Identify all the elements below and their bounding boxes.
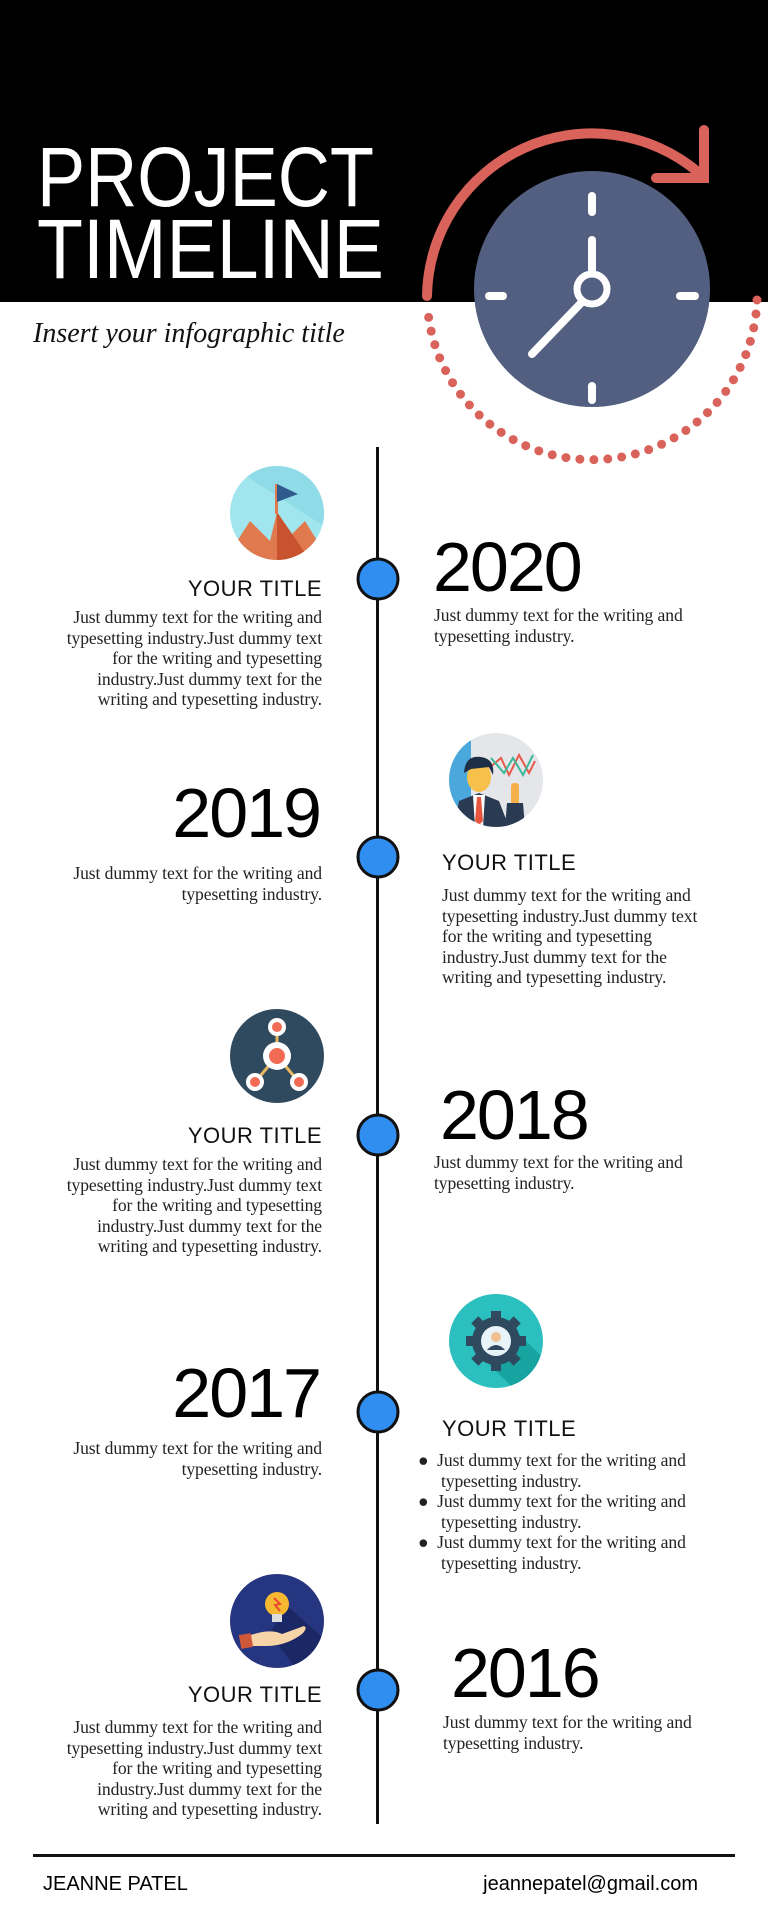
footer rule [33,1854,735,1857]
entry 2016 right text: Just dummy text for the writing and [443,1712,692,1732]
entry 2018 left text: industry.Just dummy text for the [97,1216,322,1236]
entry 2020 left: text: industry.Just dummy text for the [97,669,322,689]
entry 2018 left text [66,1154,322,1256]
subtitle: Insert your infographic title [33,318,345,349]
entry 2018 left: title: YOUR TITLE [188,1123,322,1148]
entry 2016 right text: typesetting industry. [443,1733,583,1753]
entry 2019 right text: writing and typesetting industry. [442,967,666,987]
entry 2018 left text: writing and typesetting industry. [98,1236,322,1256]
entry 2019 right text: typesetting industry.Just dummy text [442,906,697,926]
title: PROJECT [37,130,374,224]
entry 2018 right text: Just dummy text for the writing and [434,1152,683,1172]
entry 2016 left text: for the writing and typesetting [112,1758,322,1778]
entry 2018 left text: for the writing and typesetting [112,1195,322,1215]
icon: hand with bulb [230,1574,324,1668]
entry 2019 right text: for the writing and typesetting [442,926,652,946]
entry 2017 right: title: YOUR TITLE [442,1416,576,1441]
entry 2017 right bullet list: ● Just dummy text for the writing and [418,1532,686,1552]
entry 2017 left text: typesetting industry. [182,1459,322,1479]
entry 2018 right text [434,1152,683,1193]
year 2019: 2019 [172,774,320,852]
entry 2017 right bullet list: ● Just dummy text for the writing and [418,1491,686,1511]
entry 2018 right text: typesetting industry. [434,1173,574,1193]
entry 2019 left text: Just dummy text for the writing and [73,863,322,883]
entry 2016 left text: typesetting industry.Just dummy text [67,1738,322,1758]
entry 2016 left text [66,1717,322,1819]
entry 2016 left text: Just dummy text for the writing and [73,1717,322,1737]
entry 2018 left text: typesetting industry.Just dummy text [67,1175,322,1195]
entry 2020 right text: Just dummy text for the writing and [434,605,683,625]
icon: businessman [449,733,543,827]
entry 2018 left text: Just dummy text for the writing and [73,1154,322,1174]
entry 2016 left: title: YOUR TITLE [188,1682,322,1707]
icon: clock with arrows [422,125,762,464]
entry 2017 right bullet list: typesetting industry. [441,1512,581,1532]
entry 2016 right text [443,1712,692,1753]
entry 2019 right: title: YOUR TITLE [442,850,576,875]
entry 2019 right text [442,885,698,987]
entry 2017 left text [73,1438,322,1479]
entry 2017 right bullet list: ● Just dummy text for the writing and [418,1450,686,1470]
entry 2020 right text: typesetting industry. [434,626,574,646]
entry 2016 left text: industry.Just dummy text for the [97,1779,322,1799]
entry 2020 left: text: Just dummy text for the writing and [73,607,322,627]
entry 2019 right text: industry.Just dummy text for the [442,947,667,967]
timeline line [376,447,379,1824]
year 2017: 2017 [172,1354,320,1432]
entry 2020 left: text: writing and typesetting industry. [98,689,322,709]
entry 2017 left text: Just dummy text for the writing and [73,1438,322,1458]
year 2020: 2020 [433,528,581,606]
year 2018: 2018 [440,1076,588,1154]
entry 2017 right bullet list: typesetting industry. [441,1553,581,1573]
icon: gear [449,1294,543,1388]
entry 2019 left text [73,863,322,904]
entry 2020 left: title: YOUR TITLE [188,576,322,601]
entry 2017 right bullet list [418,1450,686,1573]
entry 2020 right text [434,605,683,646]
footer email: jeannepatel@gmail.com [483,1873,698,1895]
entry 2019 right text: Just dummy text for the writing and [442,885,691,905]
entry 2020 left: text: for the writing and typesetting [112,648,322,668]
entry 2020 left: text [66,607,322,709]
footer name: JEANNE PATEL [43,1873,188,1895]
icon: molecule [230,1009,324,1103]
icon: mountain flag [230,466,324,560]
entry 2020 left: text: typesetting industry.Just dummy text [67,628,322,648]
entry 2016 left text: writing and typesetting industry. [98,1799,322,1819]
timeline dots [356,558,400,1712]
year 2016: 2016 [451,1634,599,1712]
title [37,130,384,290]
header black band [0,0,768,302]
entry 2017 right bullet list: typesetting industry. [441,1471,581,1491]
entry 2019 left text: typesetting industry. [182,884,322,904]
